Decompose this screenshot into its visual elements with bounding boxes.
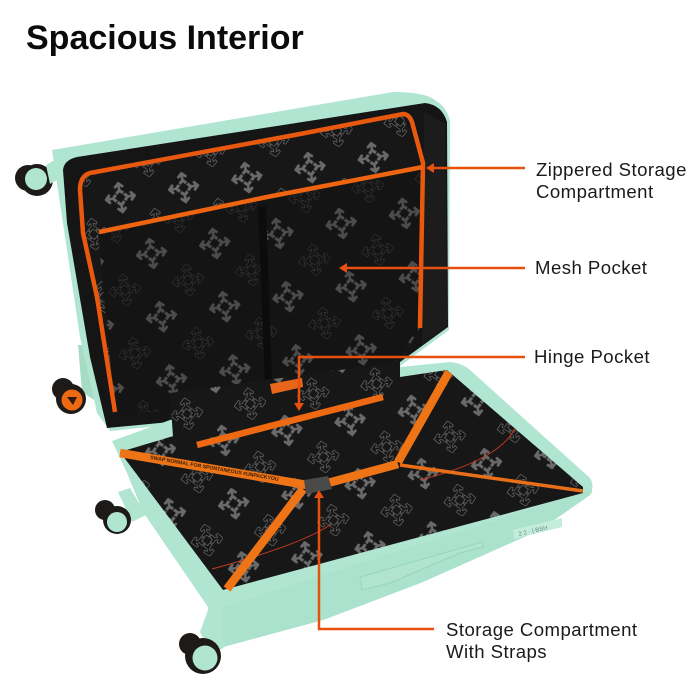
luggage handle xyxy=(360,542,483,590)
panel: upper lid shell xyxy=(52,92,450,431)
lid side gusset xyxy=(422,112,447,345)
callout: zippered storage compartment: Compartment xyxy=(536,181,654,202)
mesh pocket centre seam xyxy=(258,206,272,384)
zipper: hinge pocket xyxy=(197,397,383,445)
suitcase illustration xyxy=(15,92,592,674)
wheel connector: lower left xyxy=(118,488,146,522)
zipper: compartment outer xyxy=(80,114,423,412)
panel: upper lid dark interior xyxy=(63,103,448,428)
panel: mesh pocket xyxy=(98,168,422,412)
callout: hinge pocket xyxy=(294,346,650,411)
panel: hinge pocket flap xyxy=(170,362,400,450)
title: Spacious Interior xyxy=(26,19,304,57)
callout: mesh pocket: Mesh Pocket xyxy=(535,257,648,278)
callout: hinge pocket: Hinge Pocket xyxy=(534,346,650,367)
strap tag xyxy=(270,378,303,394)
callout: zippered storage compartment xyxy=(426,159,687,202)
strap print: SWAP NORMAL FOR SPONTANEOUS #UNPACKYOU xyxy=(150,455,279,483)
callout: mesh pocket xyxy=(339,257,648,278)
lower case front face xyxy=(223,490,592,647)
panel: lower case lining xyxy=(120,370,583,590)
icon: lower left wheel xyxy=(95,500,131,534)
panel: lower case shell xyxy=(112,362,592,647)
callout: storage compartment with straps: Storage Compartment xyxy=(446,619,638,640)
storage straps xyxy=(120,372,583,589)
callout: storage compartment with straps: With Straps xyxy=(446,641,547,662)
thin red cords xyxy=(212,428,515,569)
icon: bottom front wheel xyxy=(179,610,226,674)
panel: storage compartment lining xyxy=(83,116,423,412)
callout: storage compartment with straps xyxy=(314,490,638,662)
combination lock plate xyxy=(513,518,562,539)
icon: middle left wheel with orange hub xyxy=(52,345,94,414)
callout: zippered storage compartment: Zippered Storage xyxy=(536,159,687,180)
icon: upper left wheel xyxy=(15,158,60,196)
zipper: mesh pocket top xyxy=(99,167,423,232)
combination lock plate: 2 2 · |·BSH xyxy=(518,525,548,538)
icon: strap buckle xyxy=(304,476,332,494)
